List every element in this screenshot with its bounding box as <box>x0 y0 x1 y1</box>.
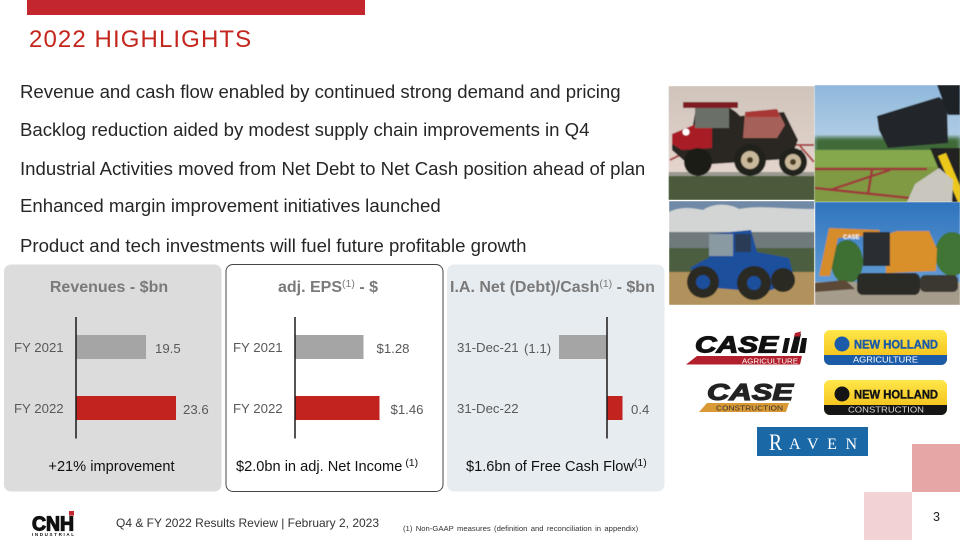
logo: CNH Industrial: CNH <box>32 514 74 536</box>
panel caption: revenues: +21% improvement <box>48 459 175 475</box>
panel heading: net cash: I.A. Net (Debt)/Cash <box>450 279 599 296</box>
title: 2022 HIGHLIGHTS <box>29 26 252 53</box>
logo: New Holland Agriculture: AGRICULTURE <box>853 354 918 364</box>
logo: New Holland Construction: CONSTRUCTION <box>848 404 924 414</box>
panel heading: revenues: Revenues - $bn <box>50 279 168 296</box>
decorative squares <box>864 444 960 540</box>
page number: 3 <box>933 510 940 524</box>
footer text: Q4 & FY 2022 Results Review | February 2, 2023 <box>116 516 379 530</box>
logo: Raven: AVEN <box>789 436 857 453</box>
bullet list: Revenue and cash flow enabled by continued strong demand and pricing <box>20 81 621 102</box>
panel: adjusted EPS <box>226 264 443 492</box>
logo: Case IH Agriculture: AGRICULTURE <box>742 356 798 366</box>
logo: Case Construction: CASE <box>707 379 794 405</box>
logo: New Holland Construction <box>824 380 947 415</box>
bar chart: revenues: 23.6 <box>183 402 209 417</box>
footnote: (1) Non-GAAP measures (definition and reconciliation in appendix) <box>403 524 639 533</box>
panel: revenues <box>4 264 222 492</box>
bullet list: Industrial Activities moved from Net Debt to Net Cash position ahead of plan <box>20 158 645 179</box>
photo: sensor on boom in field <box>814 85 960 202</box>
bullet list: Backlog reduction aided by modest supply chain improvements in Q4 <box>20 119 589 140</box>
logo: CNH Industrial: INDUSTRIAL <box>32 532 74 537</box>
logo: New Holland Construction: NEW HOLLAND <box>854 390 938 402</box>
bar chart: net cash: 31-Dec-21 <box>457 340 519 355</box>
panel: net cash <box>447 264 664 492</box>
logo: Case Construction <box>699 379 794 412</box>
panel caption: net cash: $1.6bn of Free Cash Flow <box>466 459 634 475</box>
logo: New Holland Agriculture: NEW HOLLAND <box>854 340 938 352</box>
panel caption: net cash: (1) <box>634 457 647 469</box>
photo: orange excavator <box>815 202 960 305</box>
logo: Raven: R <box>769 430 783 455</box>
panel heading: net cash: - $bn <box>612 279 655 296</box>
logo: Raven <box>757 427 868 456</box>
bar chart: revenues <box>14 317 209 438</box>
panel heading: adjusted EPS: - $ <box>355 279 378 296</box>
bar chart: adjusted EPS: $1.46 <box>390 402 424 417</box>
photo: blue tractor <box>669 201 815 305</box>
bar chart: revenues: FY 2022 <box>14 401 64 416</box>
bullet list <box>20 81 645 256</box>
bullet list: Enhanced margin improvement initiatives launched <box>20 195 441 216</box>
bar chart: revenues: 19.5 <box>155 341 181 356</box>
bar chart: revenues: FY 2021 <box>14 340 64 355</box>
photo: orange excavator: CASE <box>843 235 860 241</box>
bar chart: net cash <box>457 317 649 438</box>
bar chart: adjusted EPS: $1.28 <box>376 341 410 356</box>
panel caption: adjusted EPS: (1) <box>405 457 418 469</box>
logo: Case IH Agriculture: CASE <box>695 332 779 358</box>
panel heading: net cash: (1) <box>599 278 612 290</box>
photo: red sprayer <box>668 86 814 200</box>
logo: Case IH Agriculture <box>686 332 807 366</box>
panel heading: adjusted EPS: (1) <box>342 278 355 290</box>
bar chart: net cash: 0.4 <box>631 402 649 417</box>
bar chart: net cash: 31-Dec-22 <box>457 401 519 416</box>
bar chart: adjusted EPS: FY 2021 <box>233 340 283 355</box>
bar chart: adjusted EPS <box>233 317 424 438</box>
bar chart: net cash: (1.1) <box>524 341 551 356</box>
bullet list: Product and tech investments will fuel future profitable growth <box>20 235 526 256</box>
bar chart: adjusted EPS: FY 2022 <box>233 401 283 416</box>
panel caption: adjusted EPS: $2.0bn in adj. Net Income <box>236 459 402 475</box>
top accent bar <box>27 0 365 15</box>
logo: Case Construction: CONSTRUCTION <box>716 404 783 412</box>
panel heading: adjusted EPS: adj. EPS <box>278 279 342 296</box>
logo: New Holland Agriculture <box>824 330 947 365</box>
